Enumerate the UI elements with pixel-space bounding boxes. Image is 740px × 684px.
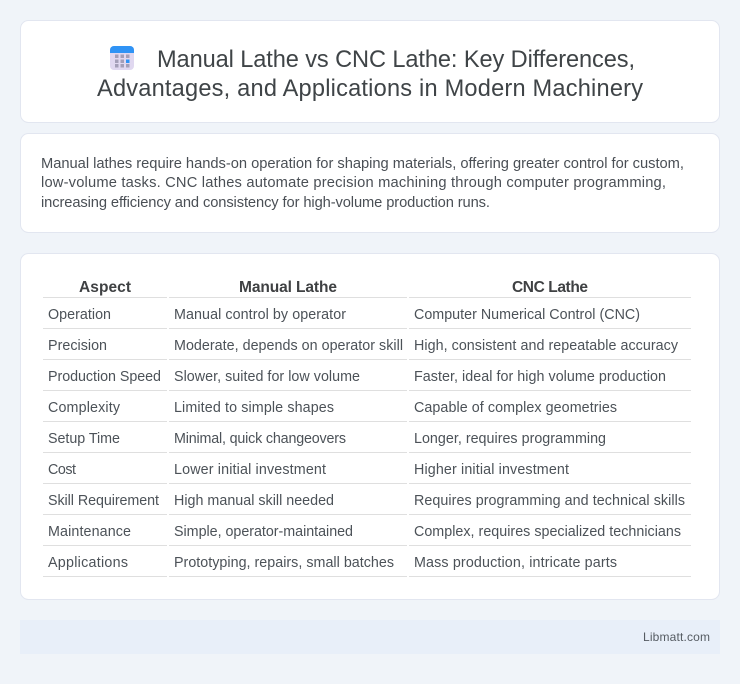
row: Complexity: Limited to simple shapes [174,400,334,416]
panel: intro text [20,134,720,232]
row: Maintenance: Complex, requires specialized technicians [414,524,681,540]
table header: Aspect [79,279,131,296]
row: Maintenance: Maintenance [48,524,131,540]
row: Setup Time [48,431,606,447]
row: Applications: Mass production, intricate parts [414,555,617,571]
row: Maintenance [48,524,681,540]
row: Production Speed [48,369,666,385]
icon: calendar grid [110,46,134,70]
row: Cost: Lower initial investment [174,462,326,478]
heading: Advantages, and Applications in Modern Machinery [97,76,643,102]
heading [97,47,643,102]
panel: intro text: low-volume tasks. CNC lathes automate precision machining through computer programming, [41,175,666,191]
panel: comparison table [20,254,720,600]
heading: Manual Lathe vs CNC Lathe: Key Differences, [157,47,635,73]
table header [79,279,588,296]
row: Skill Requirement: Requires programming and technical skills [414,493,685,509]
row: Skill Requirement: Skill Requirement [48,493,159,509]
row: Setup Time: Minimal, quick changeovers [174,431,346,447]
table header: Manual Lathe [239,279,337,296]
row: Cost: Cost [48,462,76,478]
row: Production Speed: Faster, ideal for high volume production [414,369,666,385]
row: Maintenance: Simple, operator-maintained [174,524,353,540]
table header: CNC Lathe [512,279,588,296]
panel: intro text: increasing efficiency and consistency for high-volume production runs. [41,195,490,211]
row: Precision: High, consistent and repeatable accuracy [414,338,679,354]
panel: title [20,20,720,122]
panel: intro text: Manual lathes require hands-on operation for shaping materials, offering greater control for custom, [41,156,684,172]
row: Skill Requirement: High manual skill needed [174,493,334,509]
footer: Libmatt.com [643,630,710,644]
row: Applications [48,555,617,571]
row: Skill Requirement [48,493,685,509]
row: Setup Time: Longer, requires programming [414,431,606,447]
row: Operation: Computer Numerical Control (CNC) [414,307,640,323]
row: Applications: Prototyping, repairs, small batches [174,555,394,571]
row: Precision: Moderate, depends on operator skill [174,338,403,354]
row: Production Speed: Production Speed [48,369,161,385]
row: Complexity: Capable of complex geometries [414,400,617,416]
row: Operation: Operation [48,307,111,323]
row: Applications: Applications [48,555,128,571]
row: Precision [48,338,679,354]
row: Complexity [48,400,617,416]
row: Production Speed: Slower, suited for low volume [174,369,360,385]
row: Cost: Higher initial investment [414,462,569,478]
footer [20,620,720,654]
row: Complexity: Complexity [48,400,121,416]
row: Setup Time: Setup Time [48,431,120,447]
row: Cost [48,462,569,478]
row: Operation [48,307,640,323]
row: Operation: Manual control by operator [174,307,346,323]
row: Precision: Precision [48,338,107,354]
